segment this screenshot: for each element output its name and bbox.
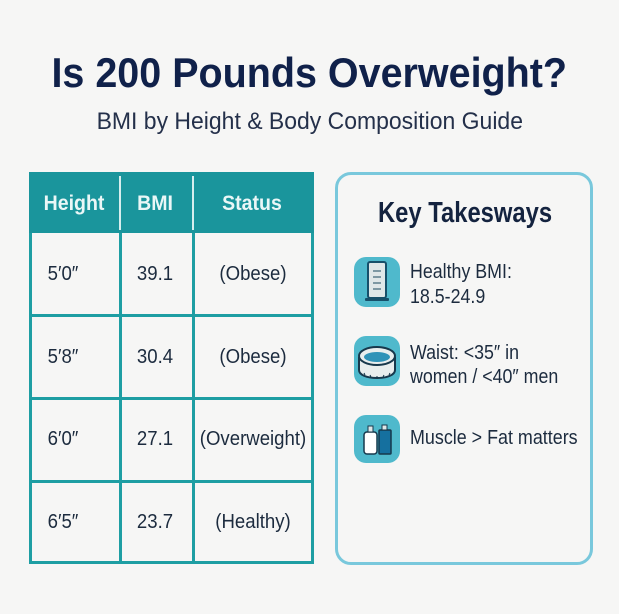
text: healthy BMI: 18.5-24.9 bbox=[410, 286, 485, 308]
icon: muscle and fat bbox=[354, 415, 400, 463]
value: 27.1: 27.1 bbox=[137, 428, 173, 450]
text: waist: Waist: <35″ in bbox=[410, 342, 519, 364]
value: 30.4: 30.4 bbox=[137, 346, 173, 368]
table header bbox=[29, 172, 314, 233]
panel heading: Key Takesways bbox=[378, 197, 552, 229]
value: 39.1: 39.1 bbox=[137, 263, 173, 285]
icon: waist tape bbox=[354, 336, 400, 386]
icon: BMI scale bbox=[354, 257, 400, 307]
row: 6'0": 6′0″ bbox=[48, 428, 78, 450]
row: 6'5": 6′5″ bbox=[48, 511, 78, 533]
status: Overweight: (Overweight) bbox=[200, 428, 306, 450]
text: healthy BMI: Healthy BMI: bbox=[410, 261, 512, 283]
text: waist bbox=[410, 342, 558, 388]
panel: key takeaways bbox=[335, 172, 593, 565]
status: Healthy: (Healthy) bbox=[215, 511, 291, 533]
status: Obese: (Obese) bbox=[219, 346, 287, 368]
header: Status: Status bbox=[222, 192, 282, 215]
row: 5'8": 5′8″ bbox=[48, 346, 78, 368]
header: BMI: BMI bbox=[137, 192, 173, 215]
value: 23.7: 23.7 bbox=[137, 511, 173, 533]
title: Is 200 Pounds Overweight? bbox=[52, 49, 567, 96]
subtitle: BMI by Height & Body Composition Guide bbox=[96, 108, 523, 135]
row: 5'0": 5′0″ bbox=[48, 263, 78, 285]
text: healthy BMI bbox=[410, 261, 512, 308]
status: Obese: (Obese) bbox=[219, 263, 287, 285]
panel: BMI table bbox=[29, 172, 314, 564]
header: Height: Height bbox=[44, 192, 104, 215]
text: muscle: Muscle > Fat matters bbox=[410, 427, 578, 449]
text: waist: women / <40″ men bbox=[410, 366, 558, 388]
